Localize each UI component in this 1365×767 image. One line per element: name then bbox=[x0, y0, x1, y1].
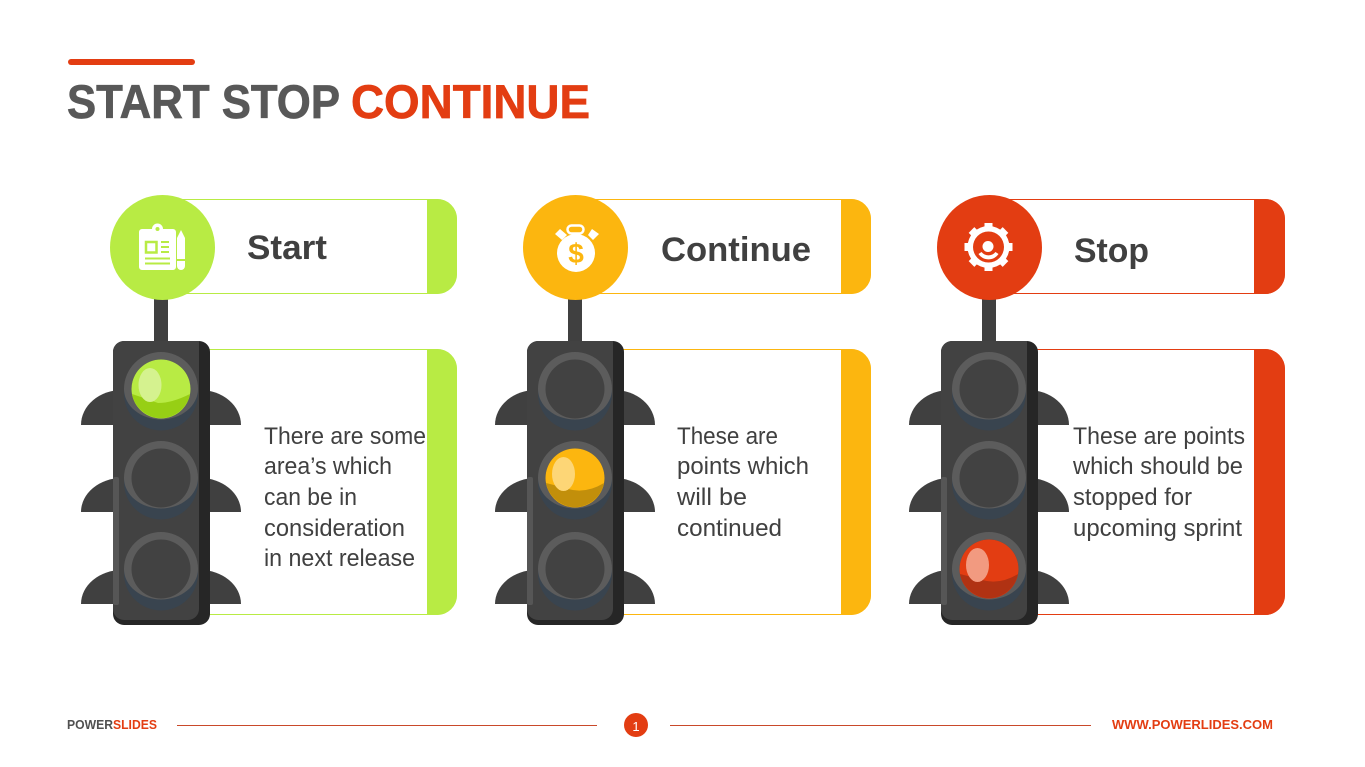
panel: continue bbox=[495, 195, 871, 625]
continue traffic light bbox=[495, 295, 655, 625]
panel: stop bbox=[909, 195, 1285, 625]
continue description: will be bbox=[676, 484, 747, 511]
start body card bbox=[190, 349, 457, 615]
continue header card: Continue bbox=[661, 231, 811, 269]
title: CONTINUE bbox=[351, 75, 590, 128]
start description: can be in bbox=[264, 484, 357, 511]
continue description: These are bbox=[677, 423, 778, 450]
stop body card bbox=[1018, 349, 1285, 615]
stop traffic light bbox=[909, 295, 1069, 625]
page number bbox=[624, 713, 648, 737]
start traffic light bbox=[81, 295, 241, 625]
start description: in next release bbox=[264, 545, 415, 572]
stop description: upcoming sprint bbox=[1073, 515, 1242, 542]
stop description: stopped for bbox=[1073, 484, 1192, 511]
continue circle bbox=[523, 195, 628, 300]
stop header card bbox=[988, 199, 1285, 294]
stop description: These are points bbox=[1073, 423, 1245, 450]
start header card bbox=[160, 199, 457, 294]
title: START STOP bbox=[67, 75, 340, 128]
start description: There are some bbox=[264, 423, 426, 450]
start header card: Start bbox=[247, 229, 327, 267]
icon: clipboard and pencil bbox=[139, 224, 185, 270]
start description: consideration bbox=[264, 515, 405, 542]
stop header card: Stop bbox=[1074, 232, 1149, 270]
page number: 1 bbox=[632, 719, 640, 734]
start description: area’s which bbox=[264, 453, 392, 480]
continue description: points which bbox=[677, 453, 809, 480]
footer brand: POWERSLIDES bbox=[67, 718, 157, 732]
stop circle bbox=[937, 195, 1042, 300]
panel: start bbox=[81, 195, 457, 625]
title accent bar bbox=[68, 59, 195, 65]
footer website: WWW.POWERLIDES.COM bbox=[1112, 718, 1273, 732]
continue description: continued bbox=[677, 515, 782, 542]
start circle bbox=[110, 195, 215, 300]
continue header card bbox=[574, 199, 871, 294]
stop description: which should be bbox=[1072, 453, 1243, 480]
icon: gear with person bbox=[964, 223, 1012, 271]
title bbox=[67, 75, 590, 128]
icon: stopwatch with dollar: $ bbox=[568, 238, 584, 269]
icon: stopwatch with dollar bbox=[555, 226, 599, 272]
continue body card bbox=[604, 349, 871, 615]
footer divider right bbox=[670, 725, 1091, 726]
footer divider left bbox=[177, 725, 597, 726]
